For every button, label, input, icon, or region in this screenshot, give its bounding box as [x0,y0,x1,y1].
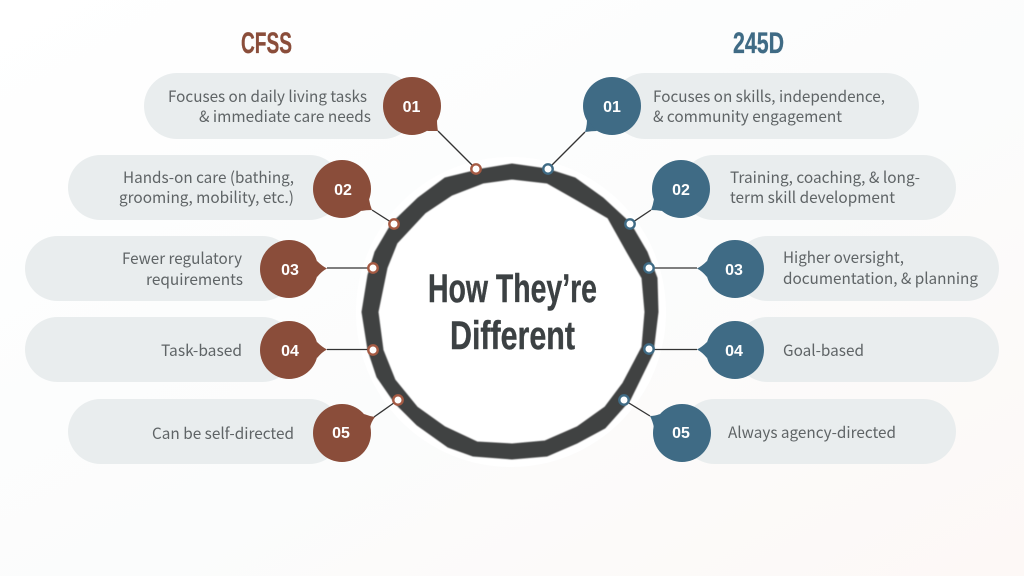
panel: CFSS item 02 [68,155,399,229]
panel: 245D item 05: Always agency-directed [728,421,896,443]
panel: 245D item 01: & community engagement [653,105,842,127]
panel: 245D item 03: 03 [725,262,743,279]
panel: 245D item 02: Training, coaching, & long- [730,166,920,188]
panel: CFSS item 01: Focuses on daily living tasks [168,85,367,107]
panel: 245D item 05: 05 [672,425,690,442]
central ring [362,164,658,459]
panel: CFSS item 02: Hands-on care (bathing, [123,166,294,188]
panel: CFSS item 02: 02 [334,182,352,199]
panel: 245D item 03: Higher oversight, [783,246,904,268]
panel: 245D item 02: 02 [672,182,690,199]
panel: CFSS item 03: requirements [146,268,243,290]
panel: 245D item 04: 04 [725,343,743,360]
panel: 245D item 02: term skill development [730,186,895,208]
center title: How They’re [428,267,597,311]
panel: 245D item 05 [619,395,956,464]
panel: CFSS item 04: Task-based [161,339,242,361]
panel: 245D item 04: Goal-based [783,339,864,361]
panel: CFSS item 01: & immediate care needs [199,105,371,127]
panel: 245D item 03 [644,236,999,301]
panel: CFSS item 03: Fewer regulatory [122,247,242,269]
panel: CFSS item 03 [25,236,378,301]
panel: CFSS item 01: 01 [403,99,420,116]
center title [428,267,597,358]
panel: CFSS item 02: grooming, mobility, etc.) [119,186,294,208]
panel: CFSS item 03: 03 [281,262,299,279]
heading: 245D: 245D [733,27,784,60]
heading: CFSS: CFSS [241,27,292,60]
panel: 245D item 04 [644,317,999,382]
center title: Different [450,314,575,358]
panel: 245D item 01 [543,73,919,174]
panel: 245D item 01: 01 [603,99,621,116]
panel: CFSS item 05: Can be self-directed [152,422,294,444]
panel: 245D item 01: Focuses on skills, independence, [653,85,885,107]
panel: CFSS item 04: 04 [281,343,299,360]
panel: CFSS item 04 [25,317,378,382]
panel: CFSS item 05 [68,395,403,464]
panel: CFSS item 05: 05 [332,425,350,442]
panel: 245D item 03: documentation, & planning [783,267,978,289]
ring halo [356,157,666,467]
panel: CFSS item 01 [144,73,481,174]
panel: 245D item 02 [625,155,956,229]
